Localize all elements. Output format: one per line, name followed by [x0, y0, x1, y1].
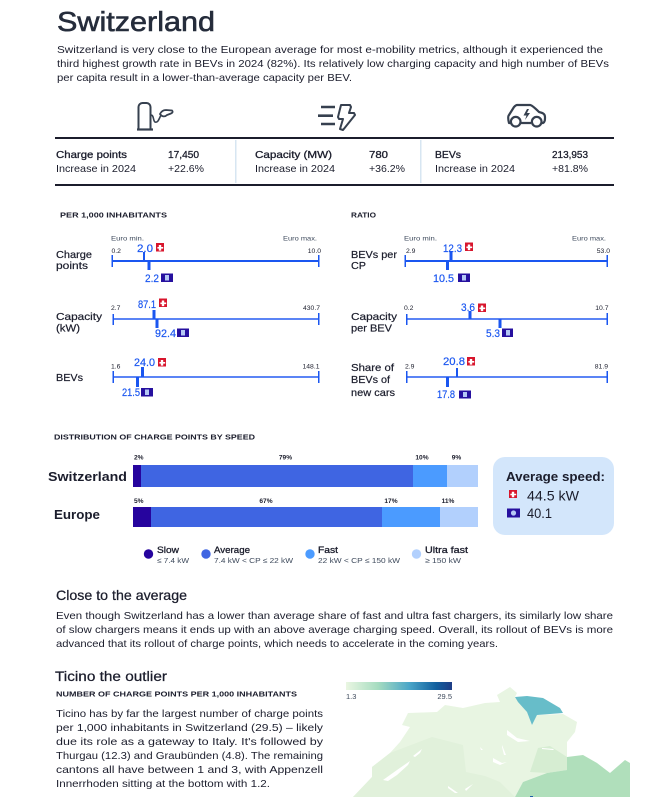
chart: BEVs per CP: CP [351, 261, 366, 272]
panel: per 1,000 inhabitants: Euro min. [111, 236, 144, 242]
chart: capacity per BEV: 10.7 [595, 305, 609, 312]
title: Switzerland [57, 6, 215, 37]
heading: Ticino the outlier: Ticino the outlier [55, 669, 168, 684]
stat: capacity [255, 150, 405, 175]
chart: BEVs: 24.0 [134, 357, 155, 369]
body text: Ticino: Thurgau (12.3) and Graubünden (4.8). The remaining [56, 751, 323, 762]
stat: charge points: 17,450 [168, 150, 199, 161]
chart: BEVs per CP: 10.5 [433, 273, 454, 285]
chart: capacity: Capacity [56, 312, 103, 323]
body text: close to the average: advanced that its rollout of charge points, which needs to accelerate in the coming years. [56, 639, 498, 650]
stat: charge points: +22.6% [168, 164, 204, 175]
map legend: colour scale [346, 682, 452, 701]
chart: capacity: 87.1 [138, 299, 156, 311]
stat: charge points: Increase in 2024 [56, 164, 136, 175]
stacked bar: Europe: 5% [134, 498, 144, 505]
callout: average speed: Average speed: [506, 469, 605, 484]
body text: close to the average [56, 611, 613, 650]
stat: charge points: Charge points [56, 150, 127, 161]
legend: speed categories: 7.4 kW < CP ≤ 22 kW [214, 556, 293, 565]
chart: capacity: (kW) [56, 324, 80, 334]
chart: share of BEVs of new cars: 17.8 [437, 389, 455, 401]
stacked bar: Switzerland: 79% [279, 454, 292, 462]
chart: BEVs per CP: 12.3 [443, 243, 462, 255]
icon: charging station [137, 103, 173, 130]
intro text: per capita result in a lower-than-average capacity per BEV. [57, 73, 352, 84]
legend: speed categories: Fast [318, 544, 338, 555]
body text: close to the average: Even though Switzerland has a lower than average share of fast and ultra fast chargers, its similarly low share [56, 611, 613, 622]
callout: average speed: 40.1 [527, 505, 552, 521]
heading: close to the average: Close to the average [56, 587, 187, 603]
body text: Ticino: Ticino has by far the largest number of charge points [56, 709, 323, 720]
chart: BEVs: BEVs [56, 373, 83, 384]
chart: charge points: Charge [56, 250, 92, 261]
stat: capacity: 780 [369, 150, 388, 161]
stacked bar: Switzerland: 2% [134, 454, 144, 462]
chart: charge points: 0.2 [112, 248, 121, 255]
heading: distribution: DISTRIBUTION OF CHARGE POINTS BY SPEED [54, 432, 256, 442]
stat: charge points [56, 150, 204, 175]
chart: charge points [56, 243, 321, 285]
stat: capacity: +36.2% [369, 164, 405, 175]
map: Switzerland cantons [353, 687, 630, 797]
chart: BEVs per CP [351, 242, 610, 285]
map legend: colour scale: 1.3 [346, 692, 356, 701]
intro text: third highest growth rate in BEVs in 2024 (82%). Its relatively low charging capacity and high number of BEVs [57, 59, 609, 70]
chart: share of BEVs of new cars [351, 356, 608, 401]
legend: speed categories: ≤ 7.4 kW [157, 556, 189, 565]
chart: charge points: points [56, 261, 88, 272]
stat: capacity: Capacity (MW) [255, 150, 332, 161]
chart: BEVs: 148.1 [302, 364, 320, 370]
chart: BEVs: 1.6 [111, 364, 121, 370]
panel: ratio: Euro min. [404, 236, 437, 242]
legend: speed categories [144, 544, 468, 565]
body text: Ticino: per 1,000 inhabitants in Switzerland (29.5) – likely [56, 723, 324, 734]
chart: BEVs: 21.5 [122, 387, 140, 399]
chart: capacity per BEV: per BEV [351, 324, 392, 334]
body text: Ticino: cantons all have between 1 and 3, with Appenzell [56, 765, 323, 776]
legend: speed categories: Average [214, 544, 250, 555]
heading: RATIO [351, 210, 376, 220]
stats table [55, 137, 614, 186]
stat: BEVs [435, 150, 588, 175]
panel: per 1,000 inhabitants: Euro max. [283, 236, 317, 242]
chart: BEVs per CP: 2.9 [406, 248, 416, 255]
intro text: Switzerland is very close to the European average for most e-mobility metrics, although it experienced the [57, 45, 603, 56]
chart: share of BEVs of new cars: new cars [351, 388, 395, 399]
chart: capacity per BEV: 5.3 [486, 328, 500, 340]
stat: BEVs: 213,953 [552, 150, 588, 161]
stacked bar: Europe [54, 498, 478, 527]
chart: capacity per BEV: 0.2 [404, 305, 414, 312]
legend: speed categories: Ultra fast [425, 544, 468, 555]
chart: capacity per BEV: Capacity [351, 312, 398, 323]
stacked bar: Switzerland: Switzerland [48, 469, 127, 484]
panel: per 1,000 inhabitants [56, 210, 321, 399]
stacked bar: Europe: 17% [384, 498, 398, 505]
panel: ratio: Euro max. [572, 236, 606, 242]
chart: capacity per BEV [351, 302, 609, 340]
intro text [57, 45, 609, 84]
stacked bar: Europe: Europe [54, 507, 100, 522]
chart: capacity: 2.7 [111, 305, 121, 312]
heading: PER 1,000 INHABITANTS [60, 210, 167, 220]
chart: charge points: 2.2 [145, 273, 159, 285]
body text: Ticino: Innerrhoden sitting at the bottom with 1.2. [56, 779, 270, 790]
stat: capacity: Increase in 2024 [255, 164, 335, 175]
callout: average speed: 44.5 kW [527, 488, 580, 504]
callout: average speed [493, 457, 614, 535]
body text: Ticino [56, 709, 324, 790]
panel: ratio [351, 210, 610, 401]
chart: share of BEVs of new cars: Share of [351, 363, 394, 374]
subheading: number of charge points: NUMBER OF CHARGE POINTS PER 1,000 INHABITANTS [56, 690, 297, 698]
chart: capacity per BEV: 3.6 [461, 302, 475, 314]
icon: electric car [508, 105, 545, 126]
chart: share of BEVs of new cars: 81.9 [595, 364, 608, 370]
stacked bar: Switzerland: 9% [452, 454, 461, 462]
chart: BEVs per CP: BEVs per [351, 250, 398, 261]
chart: charge points: 2.0 [137, 243, 153, 255]
stacked bar: Switzerland: 10% [415, 454, 429, 462]
chart: share of BEVs of new cars: 20.8 [443, 356, 465, 368]
chart: share of BEVs of new cars: BEVs of [351, 375, 390, 386]
legend: speed categories: ≥ 150 kW [425, 556, 461, 565]
chart: BEVs [56, 357, 320, 399]
stat: BEVs: +81.8% [552, 164, 588, 175]
chart: charge points: 10.0 [308, 248, 321, 255]
icon: capacity bolt [318, 105, 355, 130]
legend: speed categories: 22 kW < CP ≤ 150 kW [318, 556, 400, 565]
stat: BEVs: BEVs [435, 150, 461, 161]
map legend: colour scale: 29.5 [437, 692, 452, 701]
chart: BEVs per CP: 53.0 [597, 248, 610, 255]
stacked bar: Europe: 11% [442, 498, 455, 505]
chart: capacity: 92.4 [155, 328, 176, 340]
legend: speed categories: Slow [157, 544, 179, 555]
stat: BEVs: Increase in 2024 [435, 164, 515, 175]
chart: capacity [56, 298, 320, 340]
body text: close to the average: of slow chargers means it ends up with an above average charging speed. Overall, its rollout of BEVs is more [56, 625, 613, 636]
chart: capacity: 430.7 [303, 305, 320, 312]
stacked bar: Europe: 67% [259, 498, 273, 505]
chart: share of BEVs of new cars: 2.9 [405, 364, 415, 370]
body text: Ticino: due its role as a gateway to Italy. It's followed by [56, 737, 324, 748]
stacked bar: Switzerland [48, 454, 478, 487]
